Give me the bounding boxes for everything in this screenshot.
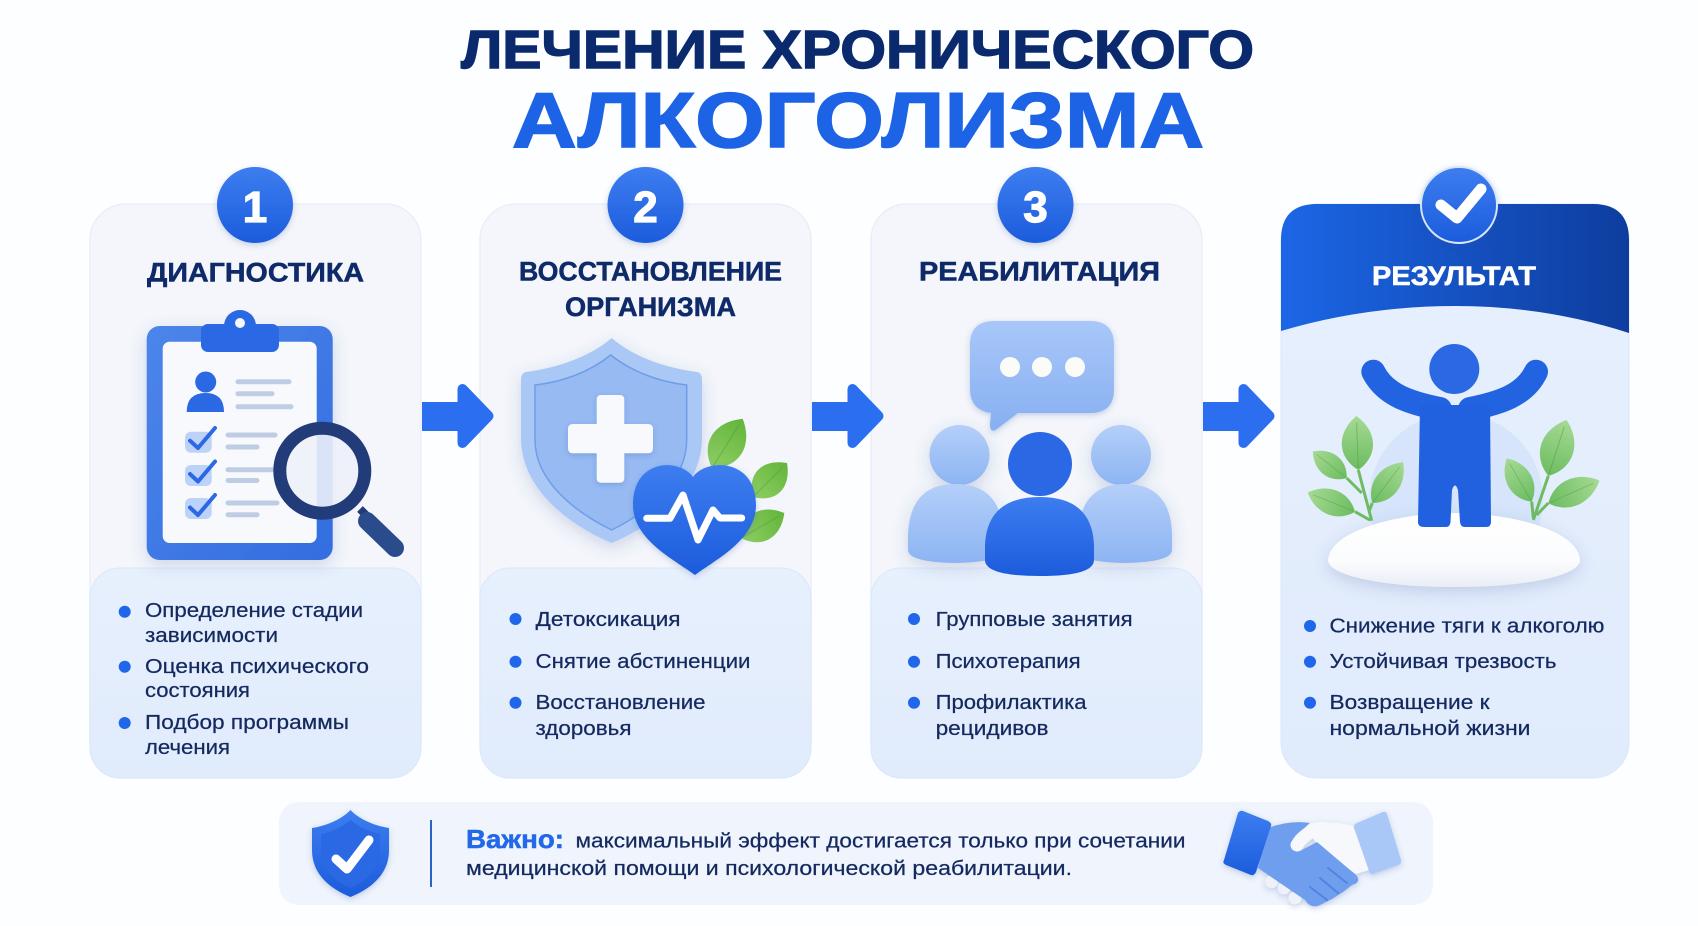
icon: shield with check: [312, 810, 389, 897]
list panel: [871, 568, 1202, 778]
list panel: Групповые занятия: [936, 608, 1133, 631]
check badge: [1421, 167, 1497, 243]
list panel: [480, 568, 811, 778]
list panel: рецидивов: [936, 717, 1049, 740]
list: Возвращение к: [1330, 691, 1491, 714]
arrow 2: [812, 389, 878, 443]
icon: group with speech bubble: [908, 321, 1172, 576]
list: [1304, 615, 1604, 740]
header band: [1281, 204, 1629, 333]
list panel: Оценка психического: [145, 655, 369, 678]
list panel: состояния: [145, 679, 250, 702]
heading: РЕЗУЛЬТАТ: [1372, 261, 1537, 291]
list panel: лечения: [145, 736, 230, 759]
list: Снижение тяги к алкоголю: [1330, 615, 1604, 638]
number badge 3: [998, 167, 1074, 243]
panel: rehabilitation: [871, 167, 1202, 778]
list: нормальной жизни: [1330, 717, 1530, 740]
note text: медицинской помощи и психологической реабилитации.: [466, 857, 1072, 880]
list panel: Психотерапия: [936, 650, 1081, 673]
heading: ВОССТАНОВЛЕНИЕ: [519, 256, 782, 286]
number badge 2: 2: [633, 183, 658, 232]
note text: максимальный эффект достигается только при сочетании: [576, 830, 1186, 852]
number badge 2: [608, 167, 684, 243]
list panel: Восстановление: [536, 691, 706, 714]
heading: РЕАБИЛИТАЦИЯ: [919, 256, 1160, 286]
callout: important note: [279, 802, 1433, 906]
icon: shield with cross, heart and leaves: [521, 338, 798, 575]
number badge 1: 1: [243, 183, 267, 232]
arrow 3: [1203, 389, 1270, 443]
icon: handshake: [1223, 811, 1401, 906]
heading: ОРГАНИЗМА: [565, 292, 736, 322]
title: ЛЕЧЕНИЕ ХРОНИЧЕСКОГО: [461, 20, 1254, 80]
list panel: Детоксикация: [536, 608, 680, 631]
arrow 1: [422, 389, 488, 443]
number badge 1: [217, 167, 293, 243]
icon: figure with raised arms on a pedestal: [1303, 344, 1605, 587]
list panel: Профилактика: [936, 691, 1087, 714]
heading: ДИАГНОСТИКА: [147, 258, 364, 288]
title: [461, 20, 1254, 164]
list panel: Определение стадии: [145, 599, 363, 622]
number badge 3: 3: [1023, 183, 1048, 232]
list panel: здоровья: [536, 717, 632, 740]
title: АЛКОГОЛИЗМА: [512, 76, 1204, 164]
heading: [519, 256, 782, 322]
note text: [466, 824, 1186, 880]
list panel: зависимости: [145, 624, 278, 647]
list panel: Снятие абстиненции: [536, 650, 750, 673]
icon: clipboard with magnifier: [147, 310, 395, 560]
divider: [430, 820, 432, 887]
panel: result: [1281, 167, 1629, 778]
list panel: Подбор программы: [145, 711, 349, 734]
list panel: [90, 568, 421, 778]
panel: recovery: [480, 167, 811, 778]
panel: diagnostics: [90, 167, 421, 778]
list: Устойчивая трезвость: [1330, 650, 1556, 673]
note text: Важно:: [466, 824, 564, 854]
